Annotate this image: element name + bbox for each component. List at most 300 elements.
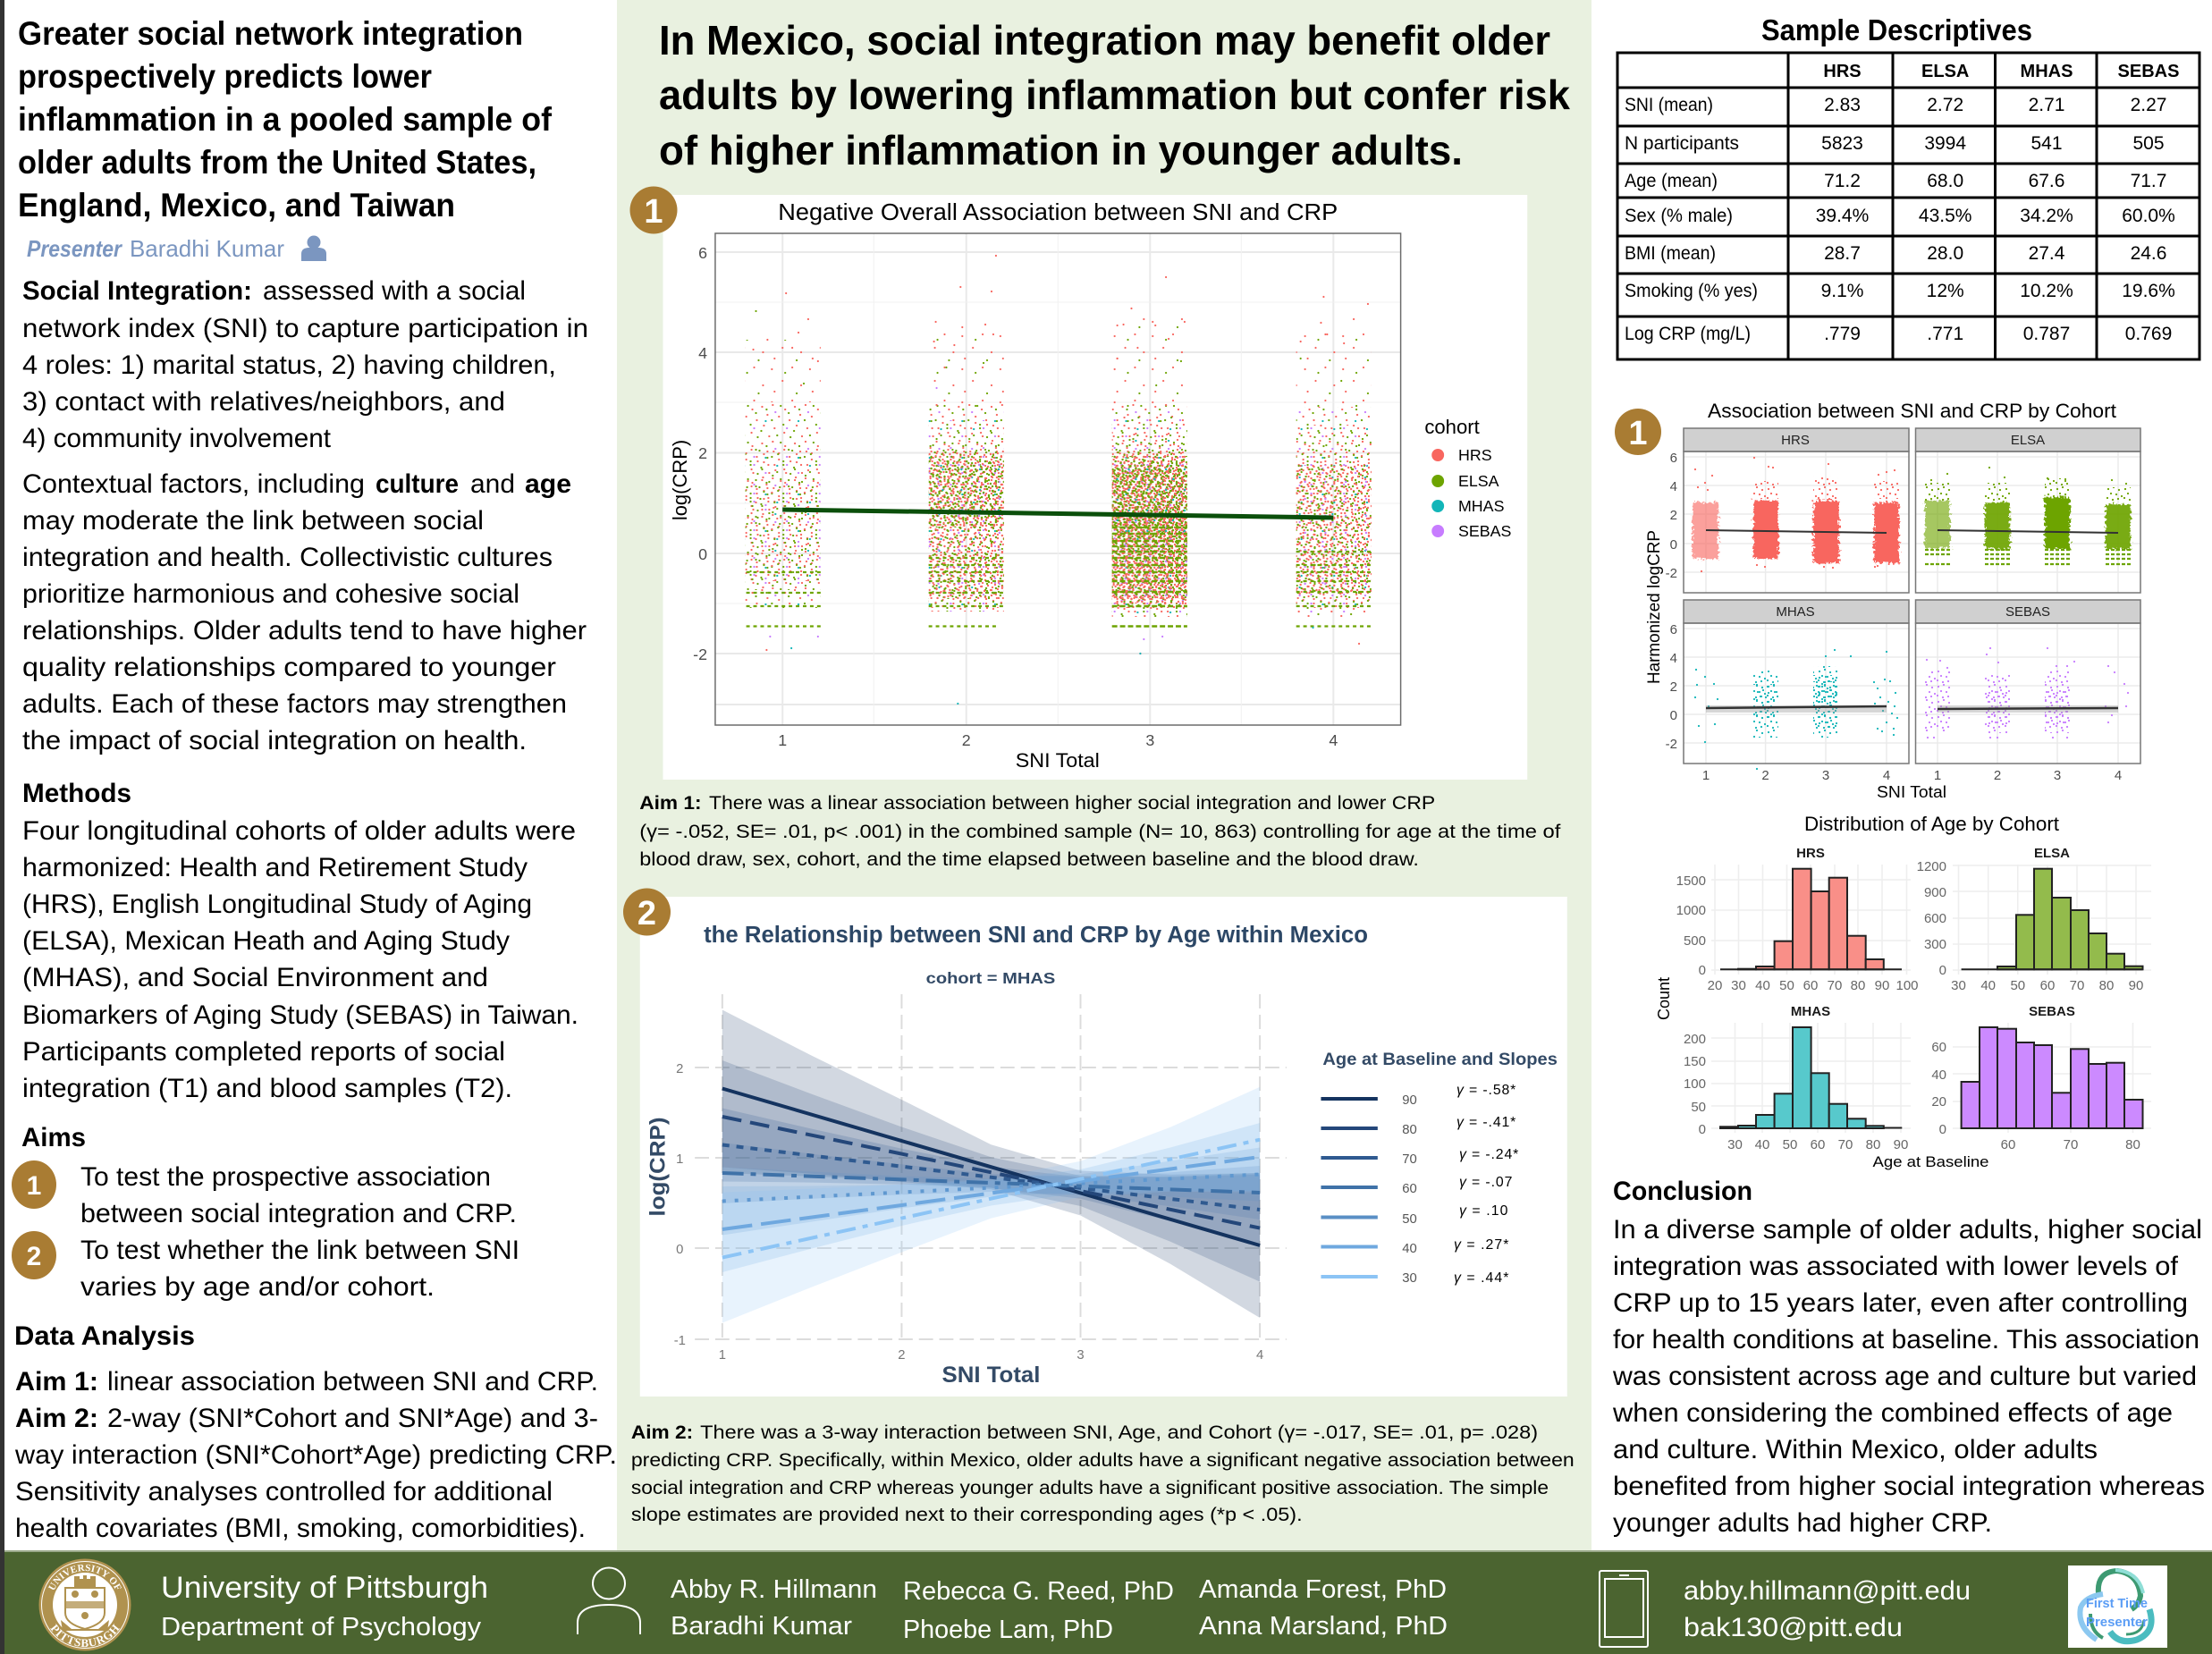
contextual factors text: may moderate the link between social xyxy=(22,506,484,536)
poster title: England, Mexico, and Taiwan xyxy=(18,187,455,224)
panel: scatter chart overall association xyxy=(663,195,1527,780)
y axis tick labels: 0 xyxy=(1670,537,1677,553)
social integration text: network index (SNI) to capture participation in xyxy=(22,314,588,343)
axis tick labels: 1500 xyxy=(1676,873,1706,889)
facet: MHAS xyxy=(1684,600,1909,769)
footer bar xyxy=(4,1550,2212,1654)
facet label: cohort = MHAS xyxy=(926,969,1055,987)
data analysis text: 2-way (SNI*Cohort and SNI*Age) and 3- xyxy=(107,1404,598,1433)
y axis labels: 4 xyxy=(698,344,707,362)
presenter line: Presenter xyxy=(27,235,123,262)
x axis labels: 1 xyxy=(719,1347,726,1363)
aim 1 text xyxy=(80,1162,517,1228)
x axis tick labels: 4 xyxy=(2115,768,2122,783)
legend: age and slopes: γ = .27* xyxy=(1454,1237,1508,1253)
table values: 10.2% xyxy=(2020,281,2073,301)
y axis labels: 2 xyxy=(698,444,707,462)
table row labels: BMI (mean) xyxy=(1625,243,1716,264)
y axis tick labels: 2 xyxy=(1670,679,1677,695)
legend: SEBAS xyxy=(1458,522,1511,540)
axis tick labels: 50 xyxy=(1779,978,1794,993)
x axis tick labels: 1 xyxy=(1934,768,1941,783)
authors column 2 xyxy=(903,1577,1174,1644)
main headline xyxy=(659,17,1570,173)
aim 2 caption xyxy=(631,1422,1575,1525)
authors column 2: Rebecca G. Reed, PhD xyxy=(903,1577,1174,1606)
axis tick labels: 40 xyxy=(1755,1137,1769,1152)
aim 1 badge xyxy=(12,1160,56,1209)
age trend lines xyxy=(722,1089,1260,1258)
axis tick labels: 90 xyxy=(1875,978,1889,993)
methods text: harmonized: Health and Retirement Study xyxy=(22,853,528,882)
table values: 34.2% xyxy=(2020,206,2073,226)
panel: centre green background xyxy=(617,0,1591,1550)
legend: age and slopes: γ = -.24* xyxy=(1459,1147,1518,1162)
x axis title: SNI Total xyxy=(1877,783,1946,801)
x axis tick labels xyxy=(1702,768,2122,783)
y axis labels: 0 xyxy=(698,545,707,563)
icon: presenter person xyxy=(301,236,326,261)
methods text: Participants completed reports of social xyxy=(22,1037,505,1067)
y axis title: Count xyxy=(1655,977,1673,1020)
histogram: HRS xyxy=(1720,869,1902,969)
y axis tick labels: 6 xyxy=(1670,451,1677,466)
table values: 541 xyxy=(2030,133,2063,154)
poster title: Greater social network integration xyxy=(18,15,523,52)
axis tick labels: 600 xyxy=(1924,911,1946,926)
icon: university seal: PITTSBURGH xyxy=(50,1624,120,1647)
y axis tick labels: 0 xyxy=(1670,708,1677,723)
data analysis text: linear association between SNI and CRP. xyxy=(107,1367,598,1397)
scatter points xyxy=(746,256,1372,704)
axis tick labels: 0 xyxy=(1699,963,1706,978)
aim 2 badge xyxy=(12,1231,56,1279)
table row labels xyxy=(1625,95,1758,344)
axis tick labels xyxy=(1676,859,2143,1152)
social integration text: 4) community involvement xyxy=(22,424,332,453)
conclusion text: integration was associated with lower levels of xyxy=(1613,1252,2179,1281)
y axis labels xyxy=(674,1061,686,1348)
axis tick labels: 80 xyxy=(1866,1137,1880,1152)
histogram: ELSA xyxy=(1962,869,2142,969)
authors column 1 xyxy=(671,1575,877,1641)
data analysis text: Aim 1: xyxy=(15,1367,98,1397)
table values: 0.787 xyxy=(2023,324,2070,344)
authors column 2: Phoebe Lam, PhD xyxy=(903,1616,1113,1644)
legend: age and slopes: 50 xyxy=(1402,1211,1417,1227)
x axis title: SNI Total xyxy=(1016,749,1100,772)
legend: age and slopes: γ = -.41* xyxy=(1456,1115,1515,1130)
x axis labels: 2 xyxy=(898,1347,906,1363)
icon: phone outline xyxy=(1600,1571,1648,1647)
axis tick labels: 90 xyxy=(2129,978,2143,993)
legend: age and slopes: 80 xyxy=(1402,1122,1417,1137)
table row labels: Sex (% male) xyxy=(1625,206,1733,226)
conclusion text: when considering the combined effects of age xyxy=(1612,1398,2173,1428)
axis tick labels: 40 xyxy=(1980,978,1996,993)
aim 1 text: between social integration and CRP. xyxy=(80,1199,517,1228)
badge 1 on cohort chart xyxy=(1615,409,1661,455)
icon: university seal xyxy=(39,1559,131,1650)
aim 1 badge: 1 xyxy=(27,1171,41,1201)
histogram: MHAS xyxy=(1720,1027,1902,1128)
authors column 1: Baradhi Kumar xyxy=(671,1612,852,1641)
y axis labels xyxy=(693,244,707,663)
authors column 3: Amanda Forest, PhD xyxy=(1199,1575,1447,1604)
x axis tick labels: 2 xyxy=(1994,768,2001,783)
axis tick labels: 150 xyxy=(1684,1054,1706,1069)
legend: age and slopes: 90 xyxy=(1402,1093,1417,1108)
contextual factors text: adults. Each of these factors may strengthen xyxy=(22,689,567,719)
table values xyxy=(1816,95,2175,344)
y axis labels: 2 xyxy=(676,1061,683,1076)
authors column 3: Anna Marsland, PhD xyxy=(1199,1612,1448,1641)
contextual factors text: and xyxy=(470,469,515,499)
facet titles: ELSA xyxy=(2034,846,2070,861)
poster title xyxy=(18,15,553,224)
y axis tick labels: 2 xyxy=(1670,508,1677,523)
axis tick labels: 0 xyxy=(1699,1122,1706,1137)
table values: 60.0% xyxy=(2122,206,2175,226)
university name xyxy=(161,1571,488,1641)
aim 1 caption: There was a linear association between higher social integration and lower CRP xyxy=(709,793,1435,814)
contextual factors text: integration and health. Collectivistic cultures xyxy=(22,543,553,572)
axis tick labels: 60 xyxy=(1931,1040,1946,1055)
main headline: adults by lowering inflammation but confer risk xyxy=(659,72,1570,118)
social integration text: 4 roles: 1) marital status, 2) having children, xyxy=(22,350,556,380)
table heading: Sample Descriptives xyxy=(1761,13,2032,46)
social integration text: assessed with a social xyxy=(263,276,526,306)
y axis tick labels: 4 xyxy=(1670,651,1677,666)
y axis labels: -1 xyxy=(674,1333,686,1348)
facet: ELSA xyxy=(1915,428,2140,593)
table row labels: N participants xyxy=(1625,133,1739,154)
badge 2 on interaction chart: 2 xyxy=(637,895,656,932)
legend: cohort xyxy=(1424,416,1480,438)
icon: first time presenter badge: First Time xyxy=(2086,1596,2148,1611)
axis tick labels: 1000 xyxy=(1676,903,1706,918)
x axis tick labels: 3 xyxy=(1822,768,1829,783)
axis tick labels: 60 xyxy=(2040,978,2055,993)
presenter line xyxy=(27,235,284,262)
x axis tick labels: 1 xyxy=(1702,768,1710,783)
axis tick labels: 80 xyxy=(2099,978,2114,993)
contextual factors text: prioritize harmonious and cohesive social xyxy=(22,579,519,609)
axis tick labels: 90 xyxy=(1894,1137,1908,1152)
y axis title: log(CRP) xyxy=(646,1117,670,1217)
axis tick labels: 30 xyxy=(1951,978,1966,993)
table values: 19.6% xyxy=(2122,281,2175,301)
table header row xyxy=(1823,62,2179,81)
facet: HRS: HRS xyxy=(1781,433,1810,448)
main headline: of higher inflammation in younger adults. xyxy=(659,127,1463,173)
y axis tick labels: 6 xyxy=(1670,622,1677,637)
legend: ELSA xyxy=(1458,472,1499,490)
aim 1 caption xyxy=(639,793,1561,870)
axis tick labels: 80 xyxy=(1851,978,1865,993)
y axis title: Harmonized logCRP xyxy=(1645,530,1664,684)
main headline: In Mexico, social integration may benefit older xyxy=(659,17,1550,63)
facet titles xyxy=(1791,846,2075,1019)
authors column 1: Abby R. Hillmann xyxy=(671,1575,877,1604)
chart title: Association between SNI and CRP by Cohort xyxy=(1708,400,2116,422)
axis tick labels: 70 xyxy=(1838,1137,1853,1152)
facet titles: HRS xyxy=(1796,846,1825,861)
table values: 9.1% xyxy=(1821,281,1863,301)
social integration text: Social Integration: xyxy=(22,276,252,306)
table values: 0.769 xyxy=(2125,324,2172,344)
table values: 39.4% xyxy=(1816,206,1869,226)
axis tick labels: 900 xyxy=(1924,885,1946,900)
contextual factors text xyxy=(22,469,587,755)
axis tick labels: 70 xyxy=(2070,978,2084,993)
panel: sample descriptives table xyxy=(1617,13,2199,359)
icon: authors person outline xyxy=(578,1568,640,1634)
panel: left column text xyxy=(12,15,617,1543)
table values: 71.7 xyxy=(2131,171,2166,191)
confidence ribbons xyxy=(722,1010,1260,1323)
table values: 24.6 xyxy=(2131,243,2166,264)
contact emails: bak130@pitt.edu xyxy=(1684,1613,1903,1642)
y axis tick labels: -2 xyxy=(1666,566,1677,581)
facet: MHAS: MHAS xyxy=(1776,604,1815,620)
axis tick labels: 200 xyxy=(1684,1032,1706,1047)
x axis tick labels: 3 xyxy=(2054,768,2061,783)
aim 2 text: To test whether the link between SNI xyxy=(80,1236,519,1265)
table values: 27.4 xyxy=(2029,243,2065,264)
x axis labels xyxy=(778,731,1338,749)
y axis title: log(CRP) xyxy=(669,440,691,520)
contact emails: abby.hillmann@pitt.edu xyxy=(1684,1576,1971,1606)
legend: age and slopes: γ = .10 xyxy=(1459,1203,1508,1219)
methods text: integration (T1) and blood samples (T2). xyxy=(22,1074,512,1103)
table values: 5823 xyxy=(1821,133,1863,154)
conclusion text: CRP up to 15 years later, even after controlling xyxy=(1613,1288,2188,1318)
legend: age and slopes: 70 xyxy=(1402,1152,1417,1167)
badge 1 on overall chart xyxy=(629,186,678,234)
y axis tick labels xyxy=(1666,451,1677,752)
axis tick labels: 60 xyxy=(1811,1137,1825,1152)
x axis labels: 3 xyxy=(1145,731,1154,749)
legend: age and slopes: 60 xyxy=(1402,1181,1417,1196)
table header row: HRS xyxy=(1823,62,1862,81)
axis tick labels: 70 xyxy=(1828,978,1842,993)
aim 2 caption: predicting CRP. Specifically, within Mexico, older adults have a significant negative association between xyxy=(631,1450,1575,1471)
university name: Department of Psychology xyxy=(161,1613,482,1641)
legend: HRS xyxy=(1458,446,1492,464)
axis tick labels: 40 xyxy=(1931,1068,1946,1083)
x axis tick labels: 4 xyxy=(1883,768,1890,783)
aim 2 text: varies by age and/or cohort. xyxy=(80,1272,435,1302)
university name: University of Pittsburgh xyxy=(161,1571,488,1605)
x axis tick labels: 2 xyxy=(1761,768,1769,783)
contextual factors text: relationships. Older adults tend to have higher xyxy=(22,616,587,646)
legend: age and slopes: Age at Baseline and Slopes xyxy=(1322,1051,1558,1069)
y axis tick labels: -2 xyxy=(1666,737,1677,752)
table values: 12% xyxy=(1927,281,1964,301)
methods text: Biomarkers of Aging Study (SEBAS) in Taiwan. xyxy=(22,1000,578,1030)
table values: 67.6 xyxy=(2029,171,2064,191)
aim 1 caption: (γ= -.052, SE= .01, p< .001) in the combined sample (N= 10, 863) controlling for age at the time of xyxy=(639,822,1561,842)
y axis labels: -2 xyxy=(693,646,707,663)
legend xyxy=(1424,416,1511,540)
conclusion text: and culture. Within Mexico, older adults xyxy=(1613,1435,2098,1464)
social integration text: 3) contact with relatives/neighbors, and xyxy=(22,387,505,417)
y axis labels: 0 xyxy=(676,1242,683,1257)
data analysis text: way interaction (SNI*Cohort*Age) predicting CRP. xyxy=(14,1440,617,1470)
table values: .779 xyxy=(1824,324,1861,344)
legend: age and slopes: 40 xyxy=(1402,1241,1417,1256)
contextual factors text: culture xyxy=(376,469,459,499)
facet titles: SEBAS xyxy=(2029,1004,2075,1019)
conclusion text: In a diverse sample of older adults, higher social xyxy=(1613,1215,2202,1245)
histogram: SEBAS xyxy=(1962,1027,2142,1128)
legend: age and slopes xyxy=(1321,1051,1558,1286)
legend: age and slopes: γ = -.58* xyxy=(1456,1083,1515,1098)
x axis labels: 4 xyxy=(1256,1347,1263,1363)
table header row: ELSA xyxy=(1921,62,1969,81)
contextual factors text: the impact of social integration on health. xyxy=(22,726,527,755)
table values: 505 xyxy=(2132,133,2165,154)
table values: 68.0 xyxy=(1927,171,1963,191)
axis tick labels: 20 xyxy=(1708,978,1722,993)
x axis title: Age at Baseline xyxy=(1872,1153,1988,1170)
conclusion text: was consistent across age and culture but varied xyxy=(1612,1362,2197,1391)
table values: 2.71 xyxy=(2029,95,2064,115)
methods text: (HRS), English Longitudinal Study of Aging xyxy=(22,890,532,919)
conclusion text: for health conditions at baseline. This association xyxy=(1613,1325,2199,1354)
chart title: Negative Overall Association between SNI and CRP xyxy=(778,200,1338,225)
table row labels: Smoking (% yes) xyxy=(1625,281,1758,301)
aim 2 caption: slope estimates are provided next to their corresponding ages (*p < .05). xyxy=(631,1505,1303,1525)
methods text xyxy=(22,816,578,1103)
table values: 28.7 xyxy=(1824,243,1861,264)
contact emails xyxy=(1684,1576,1971,1642)
aim 1 caption: Aim 1: xyxy=(639,793,702,814)
x axis labels xyxy=(719,1347,1263,1363)
panel: faceted scatter by cohort xyxy=(1645,400,2140,801)
methods text: Four longitudinal cohorts of older adults were xyxy=(22,816,576,846)
axis tick labels: 30 xyxy=(1731,978,1746,993)
axis tick labels: 100 xyxy=(1895,978,1919,993)
axis tick labels: 50 xyxy=(1783,1137,1797,1152)
aim 1 text: To test the prospective association xyxy=(80,1162,491,1192)
data analysis text: health covariates (BMI, smoking, comorbidities). xyxy=(15,1514,586,1543)
facet: SEBAS: SEBAS xyxy=(2005,604,2050,620)
methods text: (MHAS), and Social Environment and xyxy=(22,963,488,992)
table values: 43.5% xyxy=(1919,206,1971,226)
axis tick labels: 500 xyxy=(1684,933,1706,949)
social integration text xyxy=(22,276,588,453)
poster title: inflammation in a pooled sample of xyxy=(18,101,553,138)
axis tick labels: 20 xyxy=(1931,1094,1946,1110)
table values: 71.2 xyxy=(1824,171,1861,191)
axis tick labels: 60 xyxy=(1803,978,1818,993)
icon: first time presenter badge xyxy=(2068,1565,2167,1648)
conclusion text: benefited from higher social integration whereas xyxy=(1613,1472,2205,1501)
y axis labels: 1 xyxy=(676,1152,683,1167)
x axis labels: 1 xyxy=(778,731,787,749)
chart title: Distribution of Age by Cohort xyxy=(1804,813,2059,835)
y axis tick labels: 4 xyxy=(1670,479,1677,494)
data analysis text: Aim 2: xyxy=(15,1404,98,1433)
legend: age and slopes: 30 xyxy=(1402,1270,1417,1286)
x axis labels: 3 xyxy=(1076,1347,1085,1363)
axis tick labels: 30 xyxy=(1727,1137,1743,1152)
table values: 2.27 xyxy=(2131,95,2166,115)
axis tick labels: 70 xyxy=(2064,1137,2078,1152)
table header row: SEBAS xyxy=(2118,62,2179,81)
axis tick labels: 60 xyxy=(2001,1137,2015,1152)
table row labels: Age (mean) xyxy=(1625,171,1718,191)
table values: .771 xyxy=(1927,324,1963,344)
axis tick labels: 50 xyxy=(2010,978,2025,993)
contextual factors text: Contextual factors, including xyxy=(22,469,365,499)
aim 2 caption: Aim 2: xyxy=(631,1422,693,1443)
chart title: the Relationship between SNI and CRP by Age within Mexico xyxy=(704,923,1368,948)
aim 2 badge: 2 xyxy=(27,1242,41,1271)
aim 2 caption: There was a 3-way interaction between SNI, Age, and Cohort (γ= -.017, SE= .01, p= .028) xyxy=(700,1422,1538,1443)
table row labels: Log CRP (mg/L) xyxy=(1625,324,1751,344)
axis tick labels: 0 xyxy=(1939,1122,1946,1137)
aim 2 text xyxy=(80,1236,519,1302)
facet: HRS xyxy=(1684,428,1909,593)
badge 1 on cohort chart: 1 xyxy=(1628,415,1648,452)
methods text: (ELSA), Mexican Heath and Aging Study xyxy=(22,926,510,956)
axis tick labels: 50 xyxy=(1691,1100,1706,1115)
table row labels: SNI (mean) xyxy=(1625,95,1713,115)
table values: 2.83 xyxy=(1824,95,1861,115)
aims heading: Aims xyxy=(21,1123,86,1152)
icon: university seal: UNIVERSITY OF xyxy=(48,1565,122,1590)
facet: ELSA: ELSA xyxy=(2011,433,2045,448)
axis tick labels: 1200 xyxy=(1917,859,1946,874)
trend line xyxy=(782,510,1333,518)
conclusion text xyxy=(1612,1215,2205,1538)
aim 1 caption: blood draw, sex, cohort, and the time elapsed between baseline and the blood draw. xyxy=(639,849,1419,870)
data analysis text: Sensitivity analyses controlled for additional xyxy=(15,1477,553,1506)
y axis labels: 6 xyxy=(698,244,707,262)
badge 2 on interaction chart xyxy=(623,889,671,935)
contextual factors text: quality relationships compared to younger xyxy=(22,653,556,682)
axis tick labels: 100 xyxy=(1684,1076,1706,1092)
authors column 3 xyxy=(1199,1575,1448,1641)
badge 1 on overall chart: 1 xyxy=(644,193,663,231)
facet titles: MHAS xyxy=(1791,1004,1830,1019)
x axis title: SNI Total xyxy=(942,1363,1040,1388)
axis tick labels: 40 xyxy=(1755,978,1770,993)
axis tick labels: 80 xyxy=(2125,1137,2140,1152)
poster title: older adults from the United States, xyxy=(18,144,536,181)
legend: age and slopes: γ = .44* xyxy=(1454,1270,1508,1286)
x axis labels: 2 xyxy=(962,731,971,749)
conclusion text: younger adults had higher CRP. xyxy=(1613,1508,1992,1538)
panel: age distribution histograms xyxy=(1655,813,2151,1170)
presenter line: Baradhi Kumar xyxy=(130,235,284,262)
table header row: MHAS xyxy=(2021,62,2073,81)
icon: first time presenter badge: Presenter xyxy=(2086,1615,2148,1630)
table grid xyxy=(1617,53,2199,359)
aim 2 caption: social integration and CRP whereas younger adults have a significant positive association. The simple xyxy=(631,1478,1549,1498)
table values: 28.0 xyxy=(1927,243,1963,264)
contextual factors text: age xyxy=(525,469,571,499)
panel: interaction chart by age within Mexico xyxy=(640,897,1567,1397)
conclusion heading: Conclusion xyxy=(1613,1177,1752,1206)
axis tick labels: 300 xyxy=(1924,937,1946,952)
table values: 3994 xyxy=(1924,133,1966,154)
legend: MHAS xyxy=(1458,497,1505,515)
table values: 2.72 xyxy=(1927,95,1963,115)
